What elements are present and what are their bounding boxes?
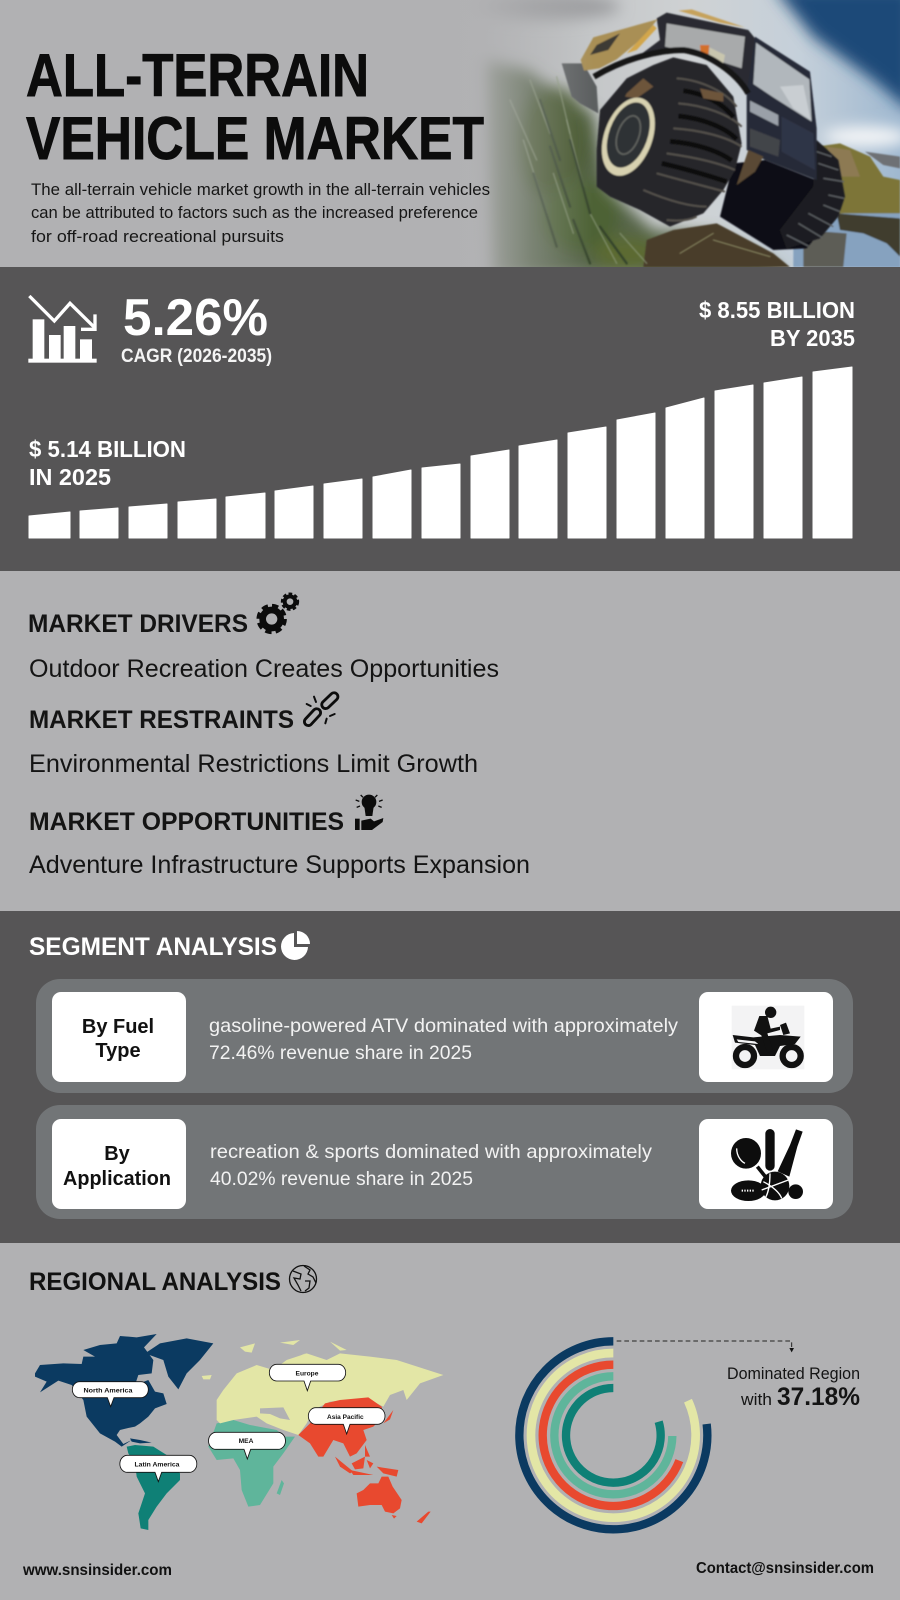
region: Europe (202, 1340, 443, 1435)
callout: North America: North America (83, 1387, 133, 1394)
CAGR label: CAGR (2026-2035) (121, 346, 272, 367)
world map (35, 1334, 443, 1530)
callout: Asia Pacific: Asia Pacific (327, 1414, 364, 1421)
2025 value (29, 436, 186, 490)
2035 value: $ 8.55 BILLION (699, 297, 855, 323)
card: by application: 40.02% revenue share in 2025 (210, 1168, 473, 1190)
card: by fuel type (36, 979, 853, 1093)
icon: ATV rider (732, 1006, 804, 1069)
callout: dominated region (727, 1364, 860, 1411)
main tyre (597, 57, 742, 227)
card: by application: Application (63, 1168, 171, 1190)
dashed leader arrow (617, 1341, 794, 1352)
callout: Europe (269, 1364, 346, 1391)
region: Asia Pacific (298, 1397, 431, 1523)
front panel (747, 37, 817, 180)
footer website: www.snsinsider.com (22, 1562, 172, 1579)
callout: MEA (209, 1432, 285, 1459)
heading: segment analysis: SEGMENT ANALYSIS (29, 933, 277, 961)
card: by fuel type: gasoline-powered ATV dominated with approximately (209, 1015, 678, 1037)
card: by fuel type: By Fuel (82, 1016, 154, 1038)
region: Middle East and Africa (208, 1420, 295, 1507)
heading: market opportunities: MARKET OPPORTUNITIES (29, 808, 344, 836)
title: VEHICLE MARKET (26, 105, 484, 172)
intro text (31, 180, 490, 246)
heading: market drivers: MARKET DRIVERS (28, 610, 248, 638)
icon: globe (290, 1266, 316, 1292)
callout: Latin America (120, 1455, 197, 1482)
heading: regional analysis: REGIONAL ANALYSIS (29, 1268, 281, 1296)
card: by application (36, 1105, 853, 1219)
2035 value (699, 297, 855, 351)
panel: market size (0, 267, 900, 571)
icon: gears (258, 594, 298, 632)
callout: North America (72, 1382, 148, 1407)
radial bar chart: regional share (519, 1341, 707, 1529)
icon: broken chain link (307, 697, 335, 723)
heading: market restraints: MARKET RESTRAINTS (29, 706, 294, 734)
title (26, 42, 484, 172)
cabin and roof (640, 13, 755, 93)
intro text: The all-terrain vehicle market growth in the all-terrain vehicles (31, 180, 490, 199)
card: by fuel type: Type (95, 1040, 141, 1062)
driver text: Outdoor Recreation Creates Opportunities (29, 655, 499, 683)
restraint text: Environmental Restrictions Limit Growth (29, 750, 478, 778)
region: Latin America (127, 1445, 180, 1530)
card: by fuel type: 72.46% revenue share in 2025 (209, 1042, 472, 1064)
opportunity text: Adventure Infrastructure Supports Expansion (29, 851, 530, 879)
icon: chart with trend arrow (28, 296, 97, 363)
panel: market dynamics (28, 594, 530, 879)
panel: segment analysis (0, 911, 900, 1243)
icon: pie chart (281, 931, 310, 960)
card: by application: By (104, 1143, 131, 1165)
2025 value: IN 2025 (29, 464, 111, 490)
region: North America (35, 1334, 213, 1447)
callout: dominated region: 37.18% (777, 1383, 860, 1411)
callout: Asia Pacific (308, 1408, 385, 1434)
footer contact: Contact@snsinsider.com (696, 1560, 874, 1577)
under body and far tyre (720, 160, 840, 250)
card: by application: recreation & sports dominated with approximately (210, 1141, 652, 1163)
callout: Europe: Europe (296, 1371, 319, 1378)
header photo: all-terrain vehicle (440, 0, 900, 277)
callout: MEA: MEA (239, 1438, 254, 1445)
title: ALL-TERRAIN (26, 42, 369, 109)
icon: hand holding light bulb (355, 795, 383, 830)
callout: dominated region: Dominated Region (727, 1364, 860, 1383)
callout: Latin America: Latin America (134, 1461, 180, 1468)
rear wheel (562, 63, 598, 113)
callout: dominated region: with (740, 1390, 772, 1409)
bar chart: market growth (29, 367, 852, 538)
CAGR value: 5.26% (123, 289, 268, 347)
intro text: for off-road recreational pursuits (31, 227, 284, 246)
2035 value: BY 2035 (770, 325, 855, 351)
intro text: can be attributed to factors such as the increased preference (31, 203, 478, 222)
icon: sports equipment (731, 1129, 803, 1201)
2025 value: $ 5.14 BILLION (29, 436, 186, 462)
